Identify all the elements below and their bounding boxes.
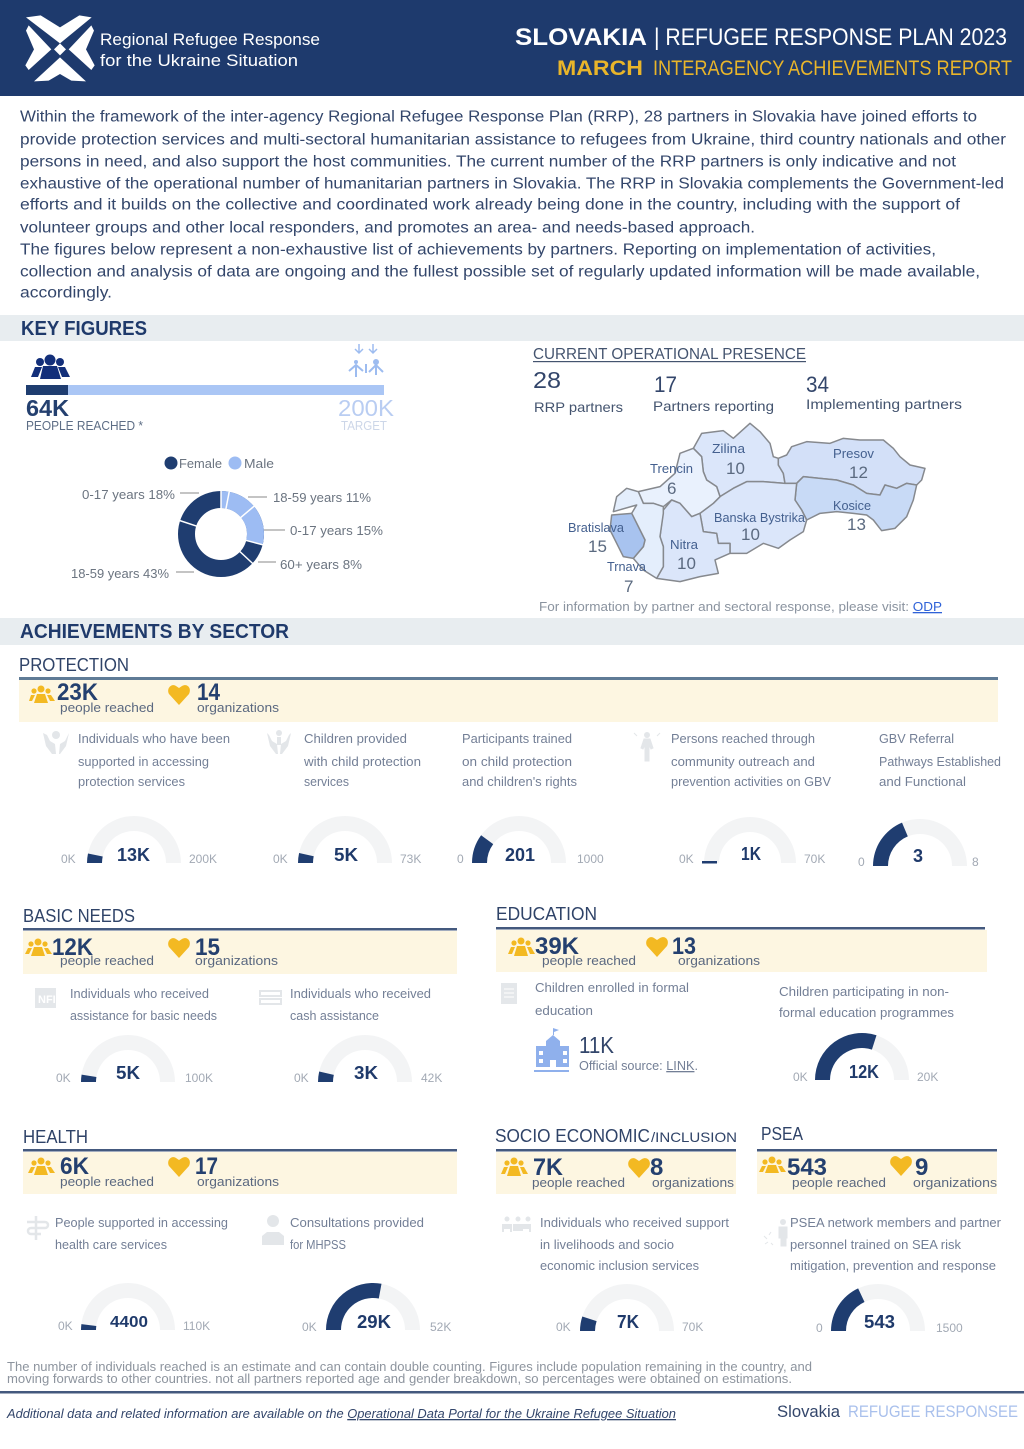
indicator: GBV outreach: community outreach and xyxy=(671,754,815,769)
protection heading: PROTECTION xyxy=(19,654,129,675)
indicator: cash assistance: cash assistance xyxy=(290,1008,379,1023)
stat: organizations: 9 xyxy=(915,1154,928,1181)
map labels: 10 xyxy=(741,525,760,544)
introduction text: volunteer groups and other local responders, and promotes an area- and needs-based approach. xyxy=(20,220,755,237)
stat: organizations: 8 xyxy=(650,1154,663,1181)
indicator: protection services: Individuals who have been xyxy=(78,731,230,746)
indicator: participants trained: 201 xyxy=(505,845,535,865)
legend: Male xyxy=(244,457,274,471)
panel: protection xyxy=(19,654,1001,869)
stat: implementing partners: 34 xyxy=(806,372,829,397)
icon: people xyxy=(29,686,55,703)
indicator: GBV outreach: prevention activities on GBV xyxy=(671,774,831,789)
introduction text: persons in need, and also support the host communities. The current number of the RRP partners is only indicative and not xyxy=(20,154,957,171)
health heading: HEALTH xyxy=(23,1126,88,1147)
donut labels: 18-59 years 43% xyxy=(71,567,169,581)
indicator: child protection: 73K xyxy=(400,852,421,866)
stat: people reached: people reached xyxy=(532,1175,625,1190)
indicator: health care: 4400 xyxy=(110,1314,148,1331)
value: target: TARGET xyxy=(341,418,387,433)
stat: implementing partners: Implementing partners xyxy=(806,396,962,412)
education heading: EDUCATION xyxy=(496,903,597,924)
indicator: MHPSS consultations: 52K xyxy=(430,1320,451,1334)
stat: partners reporting xyxy=(653,372,774,414)
icon: people xyxy=(501,1158,528,1176)
indicator: participants trained: 1000 xyxy=(577,852,604,866)
header banner xyxy=(0,0,1024,96)
stat: organizations xyxy=(650,1154,735,1190)
legend xyxy=(164,456,274,471)
donut labels: 0-17 years 15% xyxy=(290,524,383,538)
stat: people reached: 543 xyxy=(787,1154,827,1181)
ODP note: For information by partner and sectoral response, please visit: ODP xyxy=(539,599,942,614)
indicator: cash assistance: Individuals who received xyxy=(290,986,431,1001)
indicator: child protection: 0K xyxy=(273,852,288,866)
indicator: GBV referral pathways xyxy=(858,731,1001,869)
icon: handshake heart xyxy=(168,685,190,705)
indicator: PSEA training: personnel trained on SEA risk xyxy=(790,1237,961,1252)
stat: organizations: organizations xyxy=(913,1175,998,1190)
legend: Female xyxy=(179,457,222,471)
indicator: GBV referral pathways: 0 xyxy=(858,855,865,869)
panel: education xyxy=(496,903,987,1084)
stat: people reached: people reached xyxy=(60,700,154,715)
indicator: non-formal education: formal education programmes xyxy=(779,1005,954,1020)
logo text: Regional Refugee Response xyxy=(100,30,320,49)
footnote: The number of individuals reached is an estimate and can contain double counting. Figures include population remaining in the country, and xyxy=(7,1360,812,1374)
stat: organizations xyxy=(195,1153,280,1189)
socio economic heading: /INCLUSION xyxy=(651,1129,737,1145)
introduction text: The figures below represent a non-exhaustive list of achievements by partners. Reporting on implementation of activities, xyxy=(20,242,936,259)
map labels: Trnava xyxy=(607,560,646,574)
map labels xyxy=(568,442,875,596)
donut ring xyxy=(179,490,264,568)
indicator: GBV outreach xyxy=(634,731,831,866)
stat: people reached xyxy=(57,679,154,715)
indicator: MHPSS consultations: for MHPSS xyxy=(290,1237,346,1252)
stat: organizations: 14 xyxy=(197,679,221,706)
stat: organizations xyxy=(195,934,279,968)
map labels: Bratislava xyxy=(568,521,624,535)
indicator: MHPSS consultations: 29K xyxy=(357,1312,391,1332)
panel: socio economic inclusion xyxy=(495,1125,737,1334)
indicator: GBV referral pathways: 8 xyxy=(972,855,979,869)
indicator: MHPSS consultations: Consultations provided xyxy=(290,1215,424,1230)
indicator: participants trained: Participants trained xyxy=(462,731,572,746)
indicator: cash assistance: 3K xyxy=(354,1063,378,1083)
indicator: participants trained xyxy=(457,731,604,866)
indicator: livelihoods: in livelihoods and socio xyxy=(540,1237,674,1252)
indicator: PSEA training: 1500 xyxy=(936,1321,963,1335)
heading: key figures xyxy=(0,315,1024,341)
data portal note: Additional data and related information are available on the Operational Data Portal for the Ukraine Refugee Situation xyxy=(6,1406,676,1421)
indicator: child protection: Children provided xyxy=(304,731,407,746)
progress bar xyxy=(26,385,384,395)
indicator: cash assistance: 0K xyxy=(294,1071,309,1085)
stat: implementing partners xyxy=(806,372,962,412)
indicator: non-formal education xyxy=(779,984,954,1084)
protection heading xyxy=(19,654,998,722)
indicator: GBV outreach: Persons reached through xyxy=(671,731,815,746)
stat: people reached: people reached xyxy=(60,953,154,968)
basic needs heading: BASIC NEEDS xyxy=(23,905,135,926)
indicator: livelihoods: Individuals who received support xyxy=(540,1215,729,1230)
indicator: child protection: services xyxy=(304,774,349,789)
stat: people reached: people reached xyxy=(792,1175,886,1190)
education heading xyxy=(496,903,987,972)
socio economic heading: SOCIO ECONOMIC xyxy=(495,1125,650,1146)
map: Slovakia regions xyxy=(610,423,925,582)
indicator: livelihoods: economic inclusion services xyxy=(540,1258,699,1273)
indicator: non-formal education: 20K xyxy=(917,1070,938,1084)
indicator: PSEA training: 543 xyxy=(864,1312,895,1332)
footer rule xyxy=(0,1391,1024,1394)
introduction text: efforts and it builds on the collective and coordinated work already being done in the country, including with the support of xyxy=(20,197,961,214)
indicator: participants trained: 0 xyxy=(457,852,464,866)
stat: people reached: 6K xyxy=(60,1153,90,1180)
stat: organizations: 13 xyxy=(672,933,696,960)
value: people reached: 64K xyxy=(26,395,69,421)
indicator: cash assistance xyxy=(260,986,442,1085)
footnote: moving forwards to other countries. not all partners reported age and gender breakdown, so percentages were obtained on estimations. xyxy=(7,1372,792,1386)
indicator: basic needs assistance: assistance for basic needs xyxy=(70,1008,217,1023)
indicator: basic needs assistance: NFI xyxy=(38,994,56,1006)
stat: RRP partners: 28 xyxy=(533,367,561,393)
stat: people reached: 23K xyxy=(57,679,99,706)
indicator: basic needs assistance xyxy=(35,986,217,1085)
indicator: non-formal education: 0K xyxy=(793,1070,808,1084)
stat: organizations: organizations xyxy=(195,953,279,968)
indicator: PSEA training: mitigation, prevention and response xyxy=(790,1258,996,1273)
donut labels: 0-17 years 18% xyxy=(82,488,175,502)
chart: age and gender donut xyxy=(71,456,383,581)
footer brand: Slovakia xyxy=(777,1402,841,1421)
indicator: cash assistance: 42K xyxy=(421,1071,442,1085)
stat: organizations: organizations xyxy=(652,1175,735,1190)
stat: organizations xyxy=(672,933,761,968)
stat: people reached: people reached xyxy=(60,1174,154,1189)
indicator: protection services: protection services xyxy=(78,774,185,789)
indicator: GBV outreach: 70K xyxy=(804,852,825,866)
report title xyxy=(515,24,1007,51)
stat: people reached: people reached xyxy=(542,953,636,968)
heading: achievements by sector xyxy=(0,618,1024,645)
logo text xyxy=(100,30,320,70)
indicator: child protection: with child protection xyxy=(303,754,421,769)
indicator: formal education: education xyxy=(535,1003,593,1018)
stat: organizations xyxy=(197,679,280,715)
stat: organizations: organizations xyxy=(197,1174,280,1189)
stat: partners reporting: Partners reporting xyxy=(653,398,774,414)
indicator: GBV referral pathways: 3 xyxy=(913,846,923,866)
heading: CURRENT OPERATIONAL PRESENCE xyxy=(533,346,806,363)
indicator: GBV outreach: 0K xyxy=(679,852,694,866)
map labels: Nitra xyxy=(670,538,698,552)
indicator: protection services: 200K xyxy=(189,852,217,866)
indicator: livelihoods xyxy=(502,1215,729,1334)
icon: target people xyxy=(349,344,383,377)
map labels: 15 xyxy=(588,537,607,556)
map labels: Presov xyxy=(833,447,875,461)
icon: people xyxy=(759,1156,786,1173)
introduction text: accordingly. xyxy=(20,285,112,302)
panel: PSEA xyxy=(757,1123,1002,1335)
indicator: formal education: Official source: LINK. xyxy=(579,1058,698,1073)
stat: organizations: 15 xyxy=(195,934,220,961)
indicator: health care: 110K xyxy=(183,1319,210,1333)
stat: people reached xyxy=(52,934,154,968)
value: target xyxy=(338,395,395,433)
panel: current operational presence xyxy=(533,346,962,614)
stat: people reached: 39K xyxy=(535,933,580,960)
indicator: participants trained: on child protection xyxy=(462,754,572,769)
indicator: GBV referral pathways: and Functional xyxy=(879,774,966,789)
introduction text: collection and analysis of data are ongoing and the fullest possible set of regularly updated information will be made available, xyxy=(20,264,980,281)
icon: handshake heart xyxy=(168,938,190,958)
indicator: PSEA training: PSEA network members and partner xyxy=(790,1215,1002,1230)
stat: people reached xyxy=(787,1154,886,1190)
indicator: GBV outreach: 1K xyxy=(741,844,761,864)
indicator: MHPSS consultations: 0K xyxy=(302,1320,317,1334)
icon: handshake heart xyxy=(628,1158,650,1178)
introduction text xyxy=(20,109,1006,302)
stat: RRP partners xyxy=(533,367,623,415)
indicator: basic needs assistance: 5K xyxy=(116,1063,140,1083)
indicator: protection services xyxy=(43,731,230,866)
logo text: for the Ukraine Situation xyxy=(100,51,298,70)
icon: handshake heart xyxy=(168,1157,190,1177)
map labels: 12 xyxy=(849,463,868,482)
icon: school xyxy=(534,1028,569,1072)
introduction text: provide protection services and multi-sectoral humanitarian assistance to refugees from Ukraine, third country nationals and other xyxy=(20,132,1006,149)
stat: organizations: organizations xyxy=(678,953,761,968)
indicator: basic needs assistance: Individuals who received xyxy=(70,986,209,1001)
panel: basic needs xyxy=(23,905,457,1085)
indicator: basic needs assistance: 0K xyxy=(56,1071,71,1085)
footer brand xyxy=(777,1402,1018,1421)
panel: people reached progress xyxy=(26,344,395,433)
map labels: 13 xyxy=(847,515,866,534)
indicator: PSEA training xyxy=(764,1215,1002,1335)
stat: people reached xyxy=(60,1153,154,1189)
indicator: health care: People supported in accessing xyxy=(55,1215,228,1230)
stat: people reached xyxy=(532,1154,625,1190)
indicator: formal education: 11K xyxy=(579,1032,615,1058)
indicator: livelihoods: 0K xyxy=(556,1320,571,1334)
basic needs heading xyxy=(23,905,457,974)
stat: partners reporting: 17 xyxy=(654,372,677,397)
indicator: participants trained: and children's rights xyxy=(462,774,577,789)
panel: health xyxy=(23,1126,457,1334)
PSEA heading: PSEA xyxy=(761,1123,804,1144)
indicator: formal education xyxy=(501,980,698,1073)
PSEA heading xyxy=(757,1123,997,1194)
health heading xyxy=(23,1126,457,1194)
icon: people xyxy=(25,938,52,956)
icon: people xyxy=(508,938,535,956)
indicator: health care: 0K xyxy=(58,1319,73,1333)
stat: people reached: 12K xyxy=(52,934,94,961)
footnote xyxy=(7,1360,812,1386)
map labels: 10 xyxy=(677,554,696,573)
report title: SLOVAKIA xyxy=(515,24,647,51)
socio economic heading xyxy=(495,1125,737,1194)
value: target: 200K xyxy=(338,395,395,421)
introduction text: Within the framework of the inter-agency Regional Refugee Response Plan (RRP), 28 partners in Slovakia have joined efforts to xyxy=(20,109,977,126)
map labels: Zilina xyxy=(712,442,745,456)
indicator: protection services: supported in accessing xyxy=(78,754,209,769)
indicator: protection services: 13K xyxy=(117,845,150,865)
value: people reached xyxy=(26,395,143,433)
indicator: livelihoods: 70K xyxy=(682,1320,703,1334)
introduction text: exhaustive of the operational number of humanitarian partners in Slovakia. The RRP in Slovakia complements the Government-led xyxy=(20,176,1004,193)
stat: organizations xyxy=(913,1154,998,1190)
donut labels: 60+ years 8% xyxy=(280,558,362,572)
map labels: 7 xyxy=(624,577,633,596)
map labels: Banska Bystrika xyxy=(714,511,805,525)
icon: regional response logo xyxy=(25,15,95,81)
icon: handshake heart xyxy=(646,937,668,957)
indicator: health care: health care services xyxy=(55,1237,167,1252)
indicator: PSEA training: 0 xyxy=(816,1321,823,1335)
indicator: MHPSS consultations xyxy=(262,1215,451,1334)
value: people reached: PEOPLE REACHED * xyxy=(26,418,143,433)
donut labels: 18-59 years 11% xyxy=(273,491,371,505)
stat: people reached xyxy=(535,933,636,968)
indicator: protection services: 0K xyxy=(61,852,76,866)
indicator: child protection: 5K xyxy=(334,845,358,865)
icon: handshake heart xyxy=(890,1156,912,1176)
indicator: non-formal education: Children participating in non- xyxy=(779,984,949,999)
donut labels xyxy=(71,488,383,581)
icon: people xyxy=(28,1158,55,1175)
map labels: 10 xyxy=(726,459,745,478)
indicator: basic needs assistance: 100K xyxy=(185,1071,213,1085)
stat: organizations: organizations xyxy=(197,700,280,715)
icon: people reached xyxy=(31,354,70,379)
heading: achievements by sector: ACHIEVEMENTS BY SECTOR xyxy=(20,621,290,643)
map labels: 6 xyxy=(667,479,676,498)
stat: organizations: 17 xyxy=(195,1153,218,1180)
indicator: formal education: Children enrolled in formal xyxy=(535,980,689,995)
report subtitle: MARCH xyxy=(557,57,643,80)
map labels: Kosice xyxy=(833,499,871,513)
map labels: Trencin xyxy=(650,462,693,476)
indicator: child protection xyxy=(267,730,421,866)
indicator: GBV referral pathways: Pathways Established xyxy=(879,754,1001,769)
heading: key figures: KEY FIGURES xyxy=(21,318,147,340)
indicator: livelihoods: 7K xyxy=(617,1312,639,1332)
indicator: health care xyxy=(27,1215,228,1333)
stat: people reached: 7K xyxy=(533,1154,564,1181)
indicator: GBV referral pathways: GBV Referral xyxy=(879,731,954,746)
stat: RRP partners: RRP partners xyxy=(534,399,623,415)
indicator: non-formal education: 12K xyxy=(849,1062,879,1082)
